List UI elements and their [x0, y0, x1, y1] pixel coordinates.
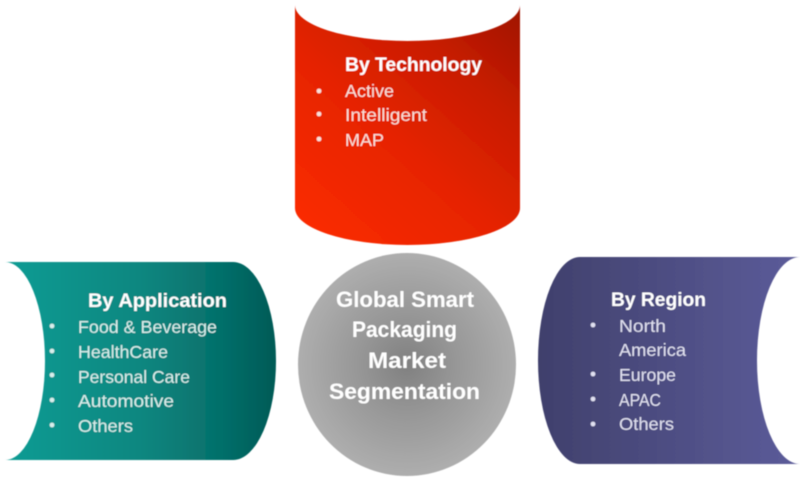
title: Global Smart Packaging Market Segmentation: Packaging: [352, 317, 457, 342]
list: region items: North: [619, 316, 666, 336]
list: technology items: [317, 81, 427, 150]
list: region items: Europe: [619, 365, 676, 385]
title: Global Smart Packaging Market Segmentation: Market: [368, 348, 447, 373]
red cylinder shape: [295, 5, 520, 245]
list: technology items: MAP: [345, 130, 384, 150]
list: region items: APAC: [619, 390, 661, 410]
panel: centre circle: [298, 253, 516, 476]
purple curved shape: [538, 257, 800, 464]
list: application items: [50, 317, 217, 436]
panel: By Application: [5, 262, 276, 460]
panel: By Region: [538, 257, 800, 464]
list: technology items: Intelligent: [345, 105, 427, 125]
list: application items: Personal Care: [78, 367, 190, 387]
title: Global Smart Packaging Market Segmentation: Segmentation: [329, 379, 480, 404]
grey circle: [298, 253, 516, 476]
list: region items: America: [619, 340, 686, 360]
heading: By Technology: By Technology: [345, 55, 482, 76]
title: Global Smart Packaging Market Segmentation: Global Smart: [336, 287, 475, 312]
list: application items: Automotive: [78, 391, 174, 411]
title: Global Smart Packaging Market Segmentation: [329, 287, 480, 404]
list: region items: [591, 316, 686, 434]
list: region items: Others: [619, 414, 674, 434]
panel: By Technology: [295, 5, 520, 245]
heading: By Application: By Application: [88, 291, 227, 312]
list: technology items: Active: [345, 81, 394, 101]
heading: By Region: By Region: [611, 290, 706, 311]
list: application items: HealthCare: [78, 342, 168, 362]
teal curved shape: [5, 262, 276, 460]
list: application items: Others: [78, 416, 133, 436]
list: application items: Food & Beverage: [78, 317, 217, 337]
